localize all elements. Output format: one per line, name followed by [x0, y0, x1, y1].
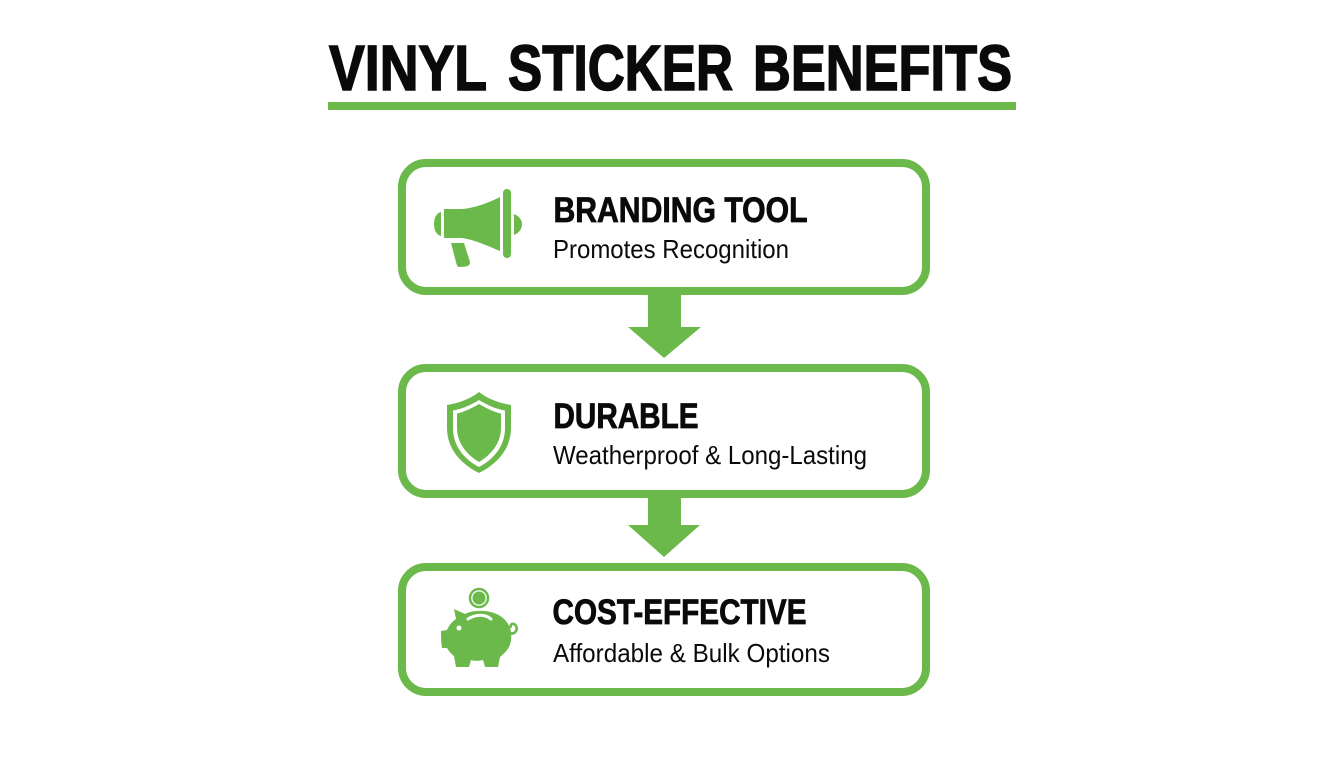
title: BENEFITS	[753, 32, 1012, 104]
panel: durable	[402, 368, 926, 494]
title: VINYL	[329, 32, 487, 104]
text: promotes recognition: Promotes Recognition	[553, 234, 789, 264]
arrow: durable to cost-effective	[628, 494, 700, 557]
text: affordable and bulk options: Affordable & Bulk Options	[553, 638, 830, 668]
icon: shield	[447, 392, 511, 473]
arrow: branding to durable	[628, 290, 701, 358]
text: weatherproof and long-lasting: Weatherproof & Long-Lasting	[553, 440, 867, 470]
panel: cost-effective	[402, 567, 926, 692]
title underline	[328, 102, 1016, 110]
icon: megaphone	[434, 189, 522, 267]
icon: piggy bank with coin	[441, 589, 517, 667]
title: STICKER	[508, 32, 733, 104]
heading: cost-effective: COST-EFFECTIVE	[552, 593, 806, 632]
title	[329, 32, 1012, 104]
heading: durable: DURABLE	[554, 397, 698, 436]
heading: branding tool: BRANDING TOOL	[554, 191, 808, 230]
panel: branding tool	[402, 163, 926, 291]
